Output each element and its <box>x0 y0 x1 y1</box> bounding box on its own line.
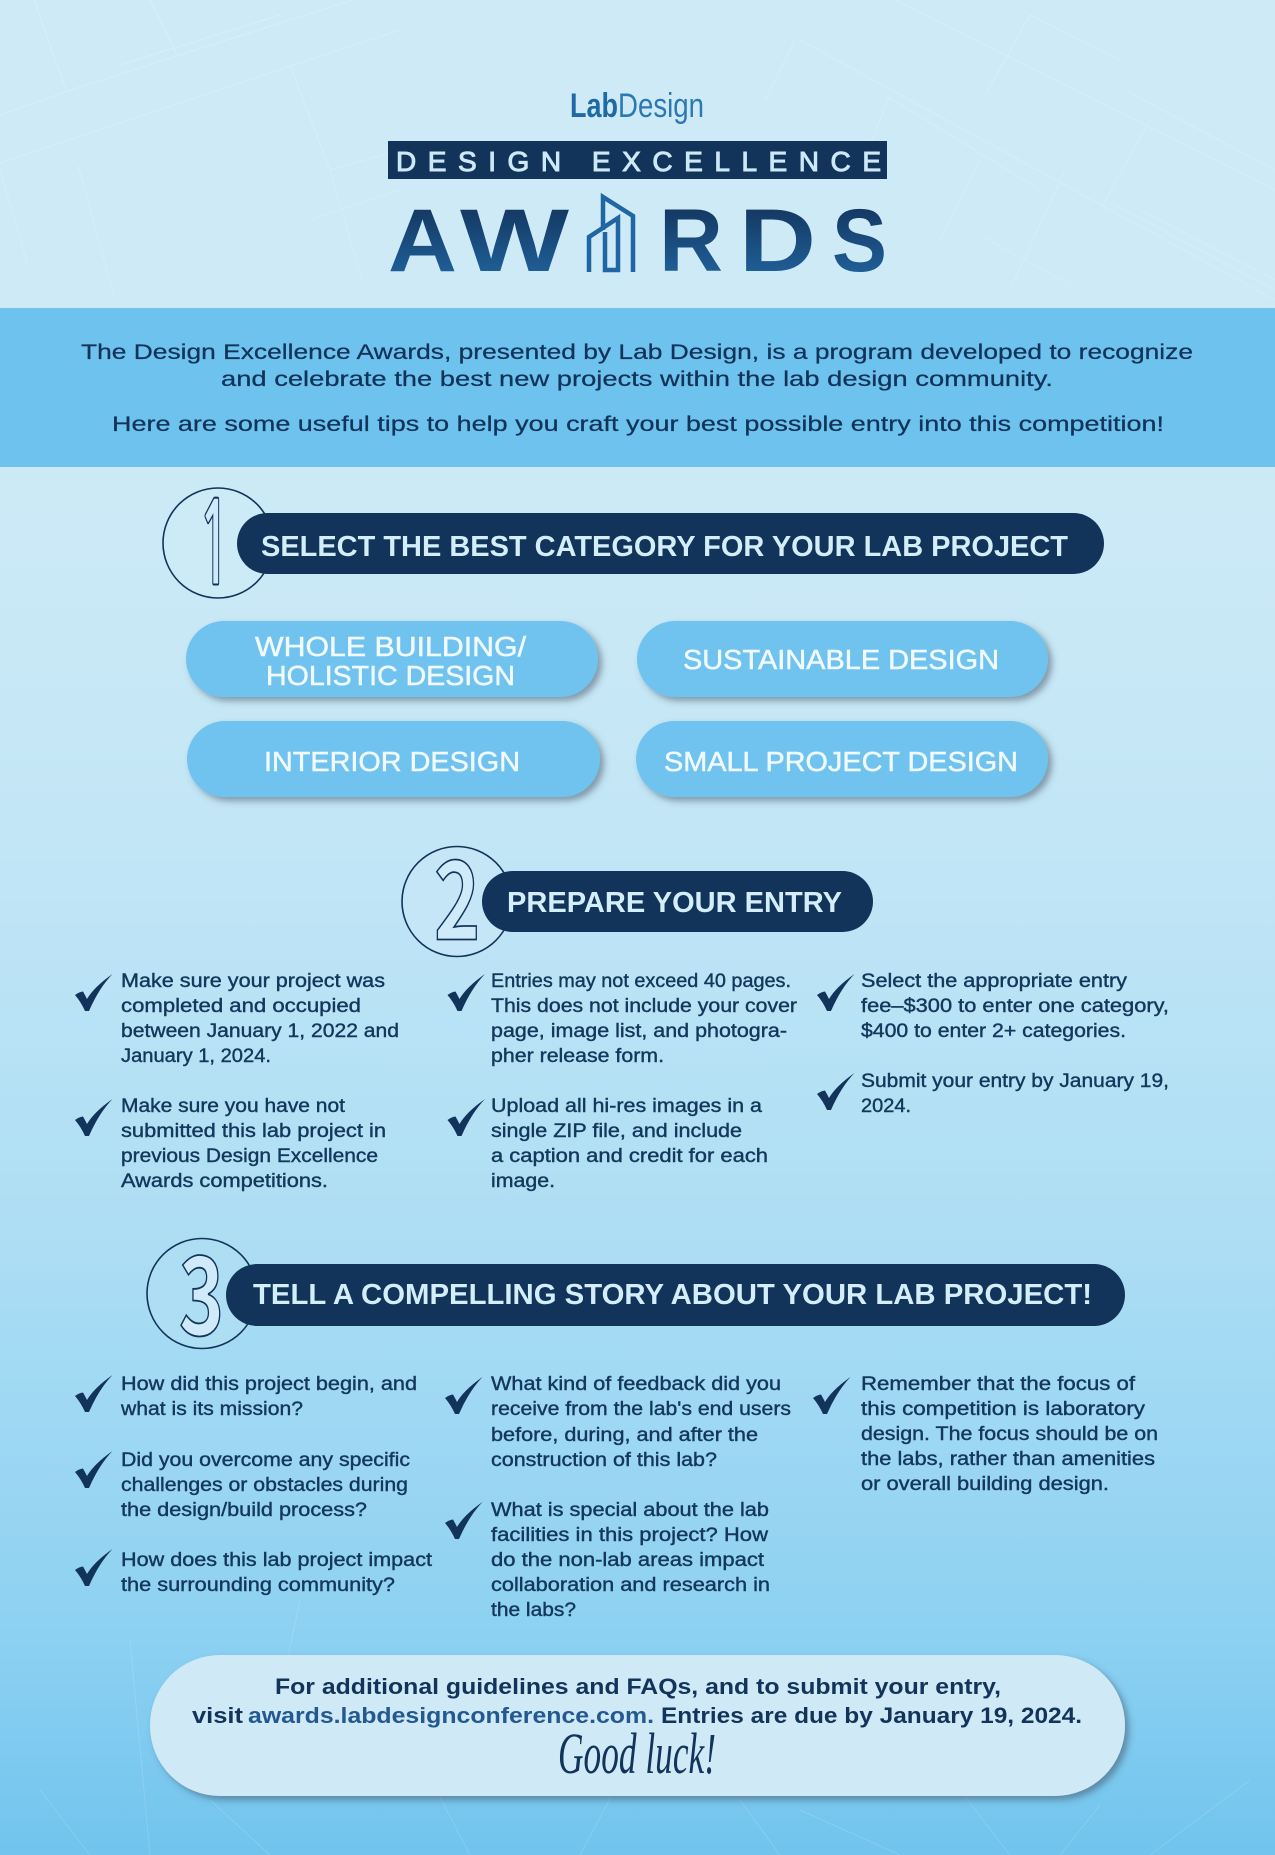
item: community impact: How does this lab project impact <box>121 1550 433 1571</box>
item: not previously submitted: previous Design Excellence <box>121 1146 378 1167</box>
item: lab facilities: facilities in this project? How <box>491 1525 768 1546</box>
item: feedback <box>445 1374 791 1471</box>
number badge 3: 3 <box>179 1210 224 1367</box>
item: lab facilities: do the non-lab areas impact <box>491 1550 765 1571</box>
button: whole building <box>186 621 598 697</box>
icon: building as letter A <box>589 197 633 272</box>
button: small project design: SMALL PROJECT DESIGN <box>664 746 1018 777</box>
title: Awards: A <box>388 190 457 290</box>
item: page limit <box>448 971 798 1067</box>
intro text: and celebrate the best new projects within the lab design community. <box>221 368 1053 391</box>
item: challenges: challenges or obstacles during <box>121 1475 408 1496</box>
intro text <box>81 341 1193 436</box>
number badge 2: 2 <box>434 814 480 972</box>
item: challenges <box>75 1450 410 1521</box>
item: deadline: 2024. <box>861 1096 911 1117</box>
intro text: Here are some useful tips to help you craft your best possible entry into this competition! <box>112 413 1164 436</box>
item: project completed: completed and occupied <box>121 996 361 1017</box>
item: entry fee: Select the appropriate entry <box>861 971 1128 992</box>
title banner: Design Excellence: DESIGN EXCELLENCE <box>396 146 881 177</box>
item: upload images: Upload all hi-res images in a <box>491 1096 762 1117</box>
item: deadline: Submit your entry by January 19, <box>861 1071 1169 1092</box>
item: competition focus: design. The focus should be on <box>861 1424 1158 1445</box>
number badge 1: 1 <box>198 490 231 602</box>
good luck script: Good luck! <box>558 1721 716 1786</box>
button: sustainable design <box>637 621 1048 697</box>
title: Awards: W <box>460 190 569 290</box>
item: community impact <box>75 1549 433 1596</box>
footer text: Entries are due by January 19, 2024. <box>661 1703 1082 1728</box>
item: upload images <box>448 1096 768 1192</box>
logo: LabDesign <box>570 87 704 125</box>
item: entry fee: $400 to enter 2+ categories. <box>861 1021 1126 1042</box>
number badge 3 <box>147 1210 257 1367</box>
item: upload images: single ZIP file, and include <box>491 1121 742 1142</box>
item: entry fee <box>817 971 1169 1042</box>
footer text: visit <box>192 1703 244 1728</box>
footer text: For additional guidelines and FAQs, and to submit your entry, <box>275 1674 1001 1699</box>
section 2 heading: PREPARE YOUR ENTRY <box>507 887 842 919</box>
item: feedback: construction of this lab? <box>491 1450 717 1471</box>
item: not previously submitted: Make sure you have not <box>121 1096 346 1117</box>
item: competition focus: the labs, rather than amenities <box>861 1449 1155 1470</box>
item: project completed: between January 1, 2022 and <box>121 1021 399 1042</box>
item: project completed: January 1, 2024. <box>121 1046 271 1067</box>
item: lab facilities: collaboration and research in <box>491 1575 770 1596</box>
item: not previously submitted: Awards competitions. <box>121 1171 328 1192</box>
section 3 checklist <box>75 1374 1158 1621</box>
button: whole building: WHOLE BUILDING/ <box>255 631 526 662</box>
item: competition focus: or overall building design. <box>861 1474 1109 1495</box>
section 2 heading <box>402 814 873 972</box>
item: project mission <box>75 1374 417 1420</box>
item: community impact: the surrounding community? <box>121 1575 395 1596</box>
item: project completed: Make sure your project was <box>121 971 385 992</box>
logo: LabDesign: Design <box>618 87 704 125</box>
item: challenges: Did you overcome any specific <box>121 1450 410 1471</box>
item: competition focus: this competition is laboratory <box>861 1399 1146 1420</box>
item: not previously submitted: submitted this lab project in <box>121 1121 386 1142</box>
section 1 heading: SELECT THE BEST CATEGORY FOR YOUR LAB PROJECT <box>261 531 1068 563</box>
number badge 2 <box>402 814 512 972</box>
item: competition focus <box>813 1374 1158 1495</box>
logo: LabDesign: Lab <box>570 87 618 125</box>
footer text <box>192 1674 1082 1728</box>
item: project completed <box>75 971 399 1067</box>
item: competition focus: Remember that the focus of <box>861 1374 1136 1395</box>
item: not previously submitted <box>75 1096 386 1192</box>
item: project mission: How did this project begin, and <box>121 1374 417 1395</box>
button: interior design <box>187 721 600 797</box>
section 1 heading <box>163 488 1104 602</box>
item: entry fee: fee–$300 to enter one category, <box>861 996 1169 1017</box>
title: Awards <box>388 190 887 290</box>
footer text: awards.labdesignconference.com. <box>248 1703 654 1728</box>
item: feedback: What kind of feedback did you <box>491 1374 781 1395</box>
item: page limit: Entries may not exceed 40 pages. <box>491 971 791 992</box>
title: Awards: R <box>659 190 723 290</box>
title: Awards: D <box>739 190 816 290</box>
item: lab facilities: What is special about the lab <box>491 1500 769 1521</box>
item: page limit: page, image list, and photogra- <box>491 1021 787 1042</box>
button: interior design: INTERIOR DESIGN <box>264 746 520 777</box>
section 2 checklist <box>75 971 1169 1192</box>
panel: introduction band <box>0 308 1275 467</box>
category buttons <box>186 621 1048 797</box>
item: challenges: the design/build process? <box>121 1500 367 1521</box>
title: Awards: S <box>832 190 887 290</box>
item: feedback: receive from the lab's end users <box>491 1399 791 1420</box>
item: deadline <box>817 1071 1169 1117</box>
button: sustainable design: SUSTAINABLE DESIGN <box>683 644 999 675</box>
item: page limit: pher release form. <box>491 1046 664 1067</box>
panel: footer callout <box>150 1655 1125 1796</box>
number badge 1 <box>163 488 273 602</box>
section 3 heading: TELL A COMPELLING STORY ABOUT YOUR LAB PROJECT! <box>253 1279 1092 1311</box>
section 3 heading <box>147 1210 1125 1367</box>
item: page limit: This does not include your cover <box>491 996 798 1017</box>
item: feedback: before, during, and after the <box>491 1425 758 1446</box>
item: lab facilities <box>445 1500 770 1621</box>
intro text: The Design Excellence Awards, presented by Lab Design, is a program developed to recognize <box>81 341 1193 364</box>
button: whole building: HOLISTIC DESIGN <box>266 660 515 691</box>
item: upload images: image. <box>491 1171 555 1192</box>
item: project mission: what is its mission? <box>120 1399 303 1420</box>
item: lab facilities: the labs? <box>491 1600 576 1621</box>
item: upload images: a caption and credit for each <box>491 1146 768 1167</box>
button: small project design <box>636 721 1048 797</box>
